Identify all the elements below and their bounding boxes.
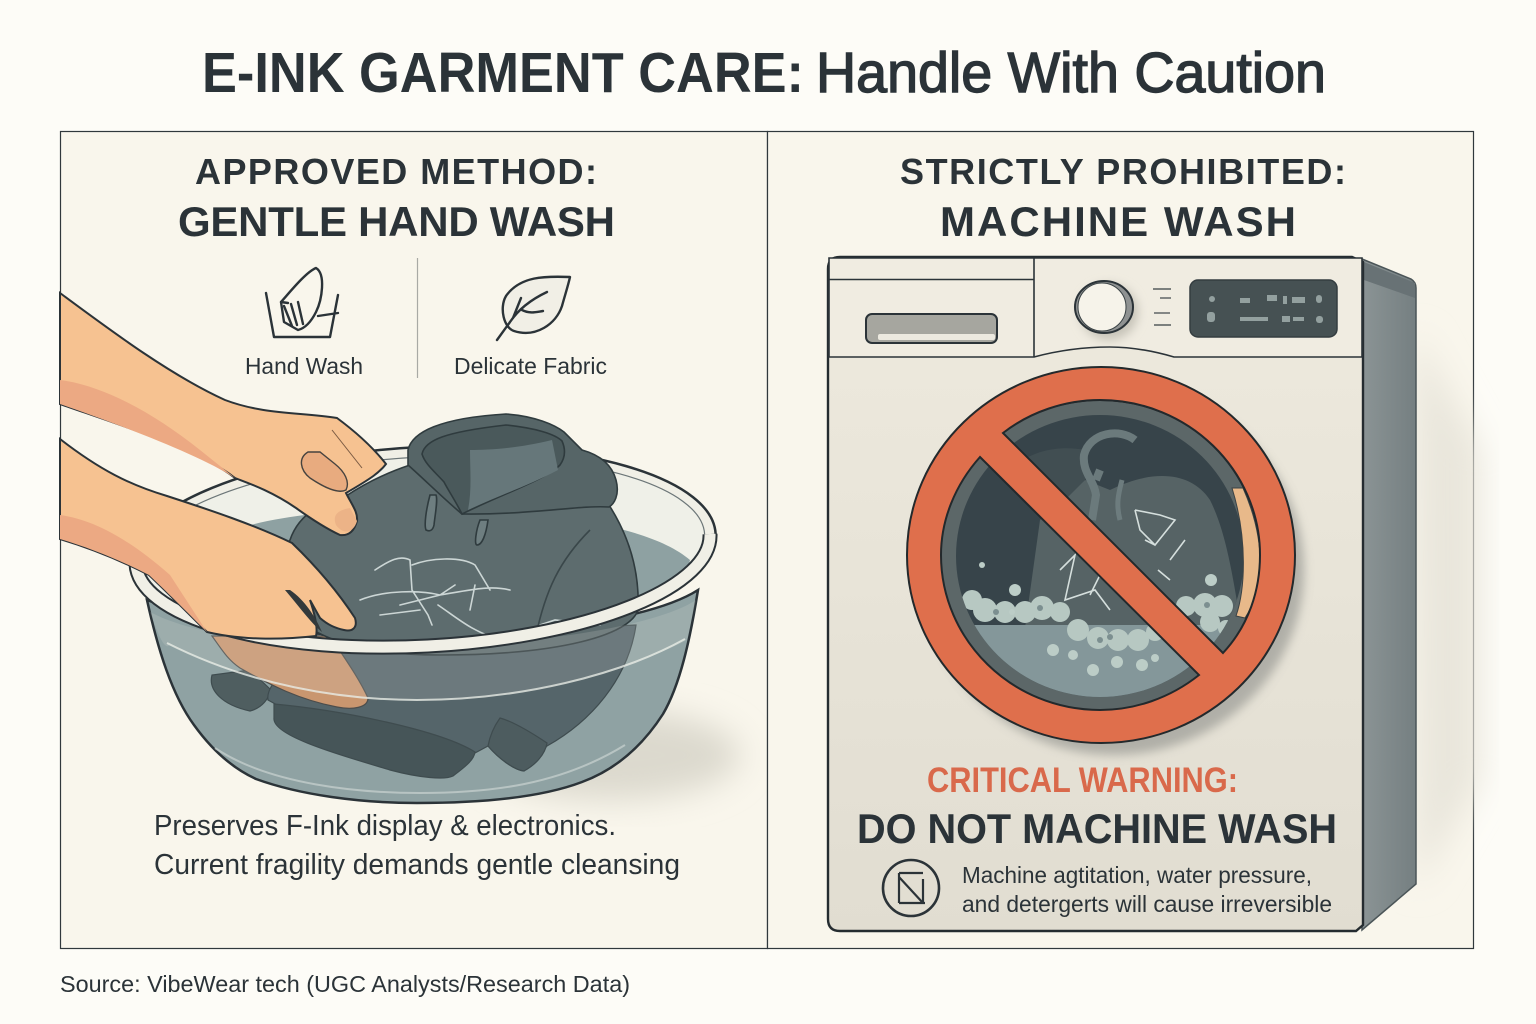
warning heading: CRITICAL WARNING: (927, 761, 1238, 800)
detergent drawer handle (866, 314, 997, 343)
upper hand and arm (60, 293, 386, 535)
bowl body with water (147, 590, 698, 803)
dial tick marks (1153, 289, 1171, 325)
caption: hand wash benefits (154, 810, 680, 881)
icon: no machine wash symbol (883, 860, 939, 916)
e-ink cracks on hoodie (360, 558, 600, 640)
submerged fingers (212, 636, 368, 708)
waterline (167, 639, 685, 700)
lower bowl highlight (215, 745, 625, 793)
icon labels: Delicate Fabric (454, 353, 607, 379)
glass band above waterline (150, 600, 696, 700)
approved heading (178, 151, 615, 245)
bowl shadow (480, 710, 740, 800)
wall shadow (1415, 330, 1480, 890)
machine side (1362, 259, 1416, 930)
caption: hand wash benefits: Current fragility demands gentle cleansing (154, 849, 680, 881)
dial knob (1075, 281, 1138, 340)
icon labels: Hand Wash (245, 353, 363, 379)
machine front (828, 257, 1363, 931)
door handle strip (1232, 488, 1260, 618)
panel: strictly prohibited (768, 132, 1480, 948)
caption: hand wash benefits: Preserves F-Ink display & electronics. (154, 810, 616, 842)
digital display (1190, 280, 1337, 337)
prohibited heading: MACHINE WASH (940, 198, 1296, 245)
door shadow (924, 385, 1304, 755)
side top strip (1364, 262, 1415, 298)
washer door with garment inside (940, 400, 1260, 712)
bowl back rim and water (125, 432, 721, 666)
control panel (829, 258, 1362, 357)
prohibition sign (907, 367, 1295, 743)
icon: hand wash symbol (266, 268, 338, 337)
title: E-INK GARMENT CARE: (202, 41, 804, 105)
title (202, 41, 1326, 105)
illustration: hands washing hoodie in bowl (60, 293, 740, 803)
panel: approved method (60, 132, 768, 948)
approved heading: GENTLE HAND WASH (178, 198, 615, 245)
warning details: Machine agtitation, water pressure, (962, 862, 1312, 888)
prohibited heading (900, 151, 1346, 245)
divider between icons (416, 258, 418, 378)
bowl front rim (136, 534, 710, 647)
approved heading: APPROVED METHOD: (195, 151, 597, 192)
icon labels (245, 353, 607, 379)
warning details: and detergerts will cause irreversible (962, 891, 1332, 917)
do not machine wash: DO NOT MACHINE WASH (857, 805, 1337, 852)
icon: leaf delicate fabric (497, 277, 570, 340)
source line: Source: VibeWear tech (UGC Analysts/Research Data) (60, 971, 630, 997)
hoodie main body (281, 414, 638, 655)
lower hand and arm (60, 439, 356, 639)
hoodie underwater (211, 625, 636, 778)
prohibited heading: STRICTLY PROHIBITED: (900, 151, 1346, 192)
title: Handle With Caution (816, 41, 1326, 105)
washing machine (828, 257, 1416, 931)
warning details (962, 862, 1332, 917)
